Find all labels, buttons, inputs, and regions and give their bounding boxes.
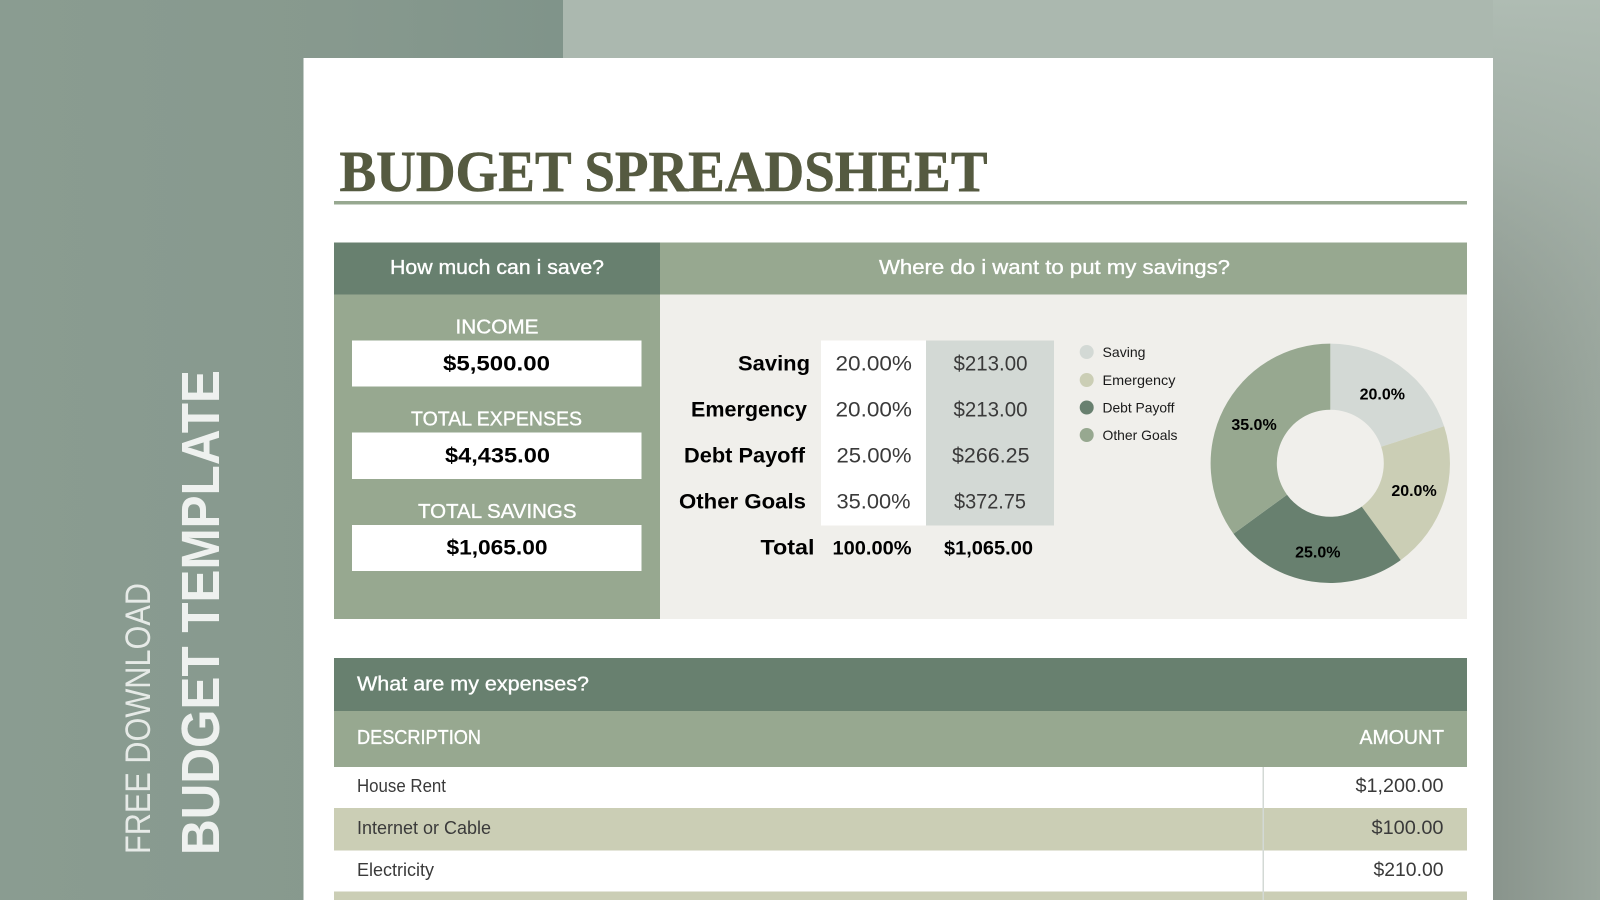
slice: saving 20% xyxy=(1330,344,1444,447)
row: house rent: House Rent xyxy=(357,776,446,796)
slice: other goals 35% xyxy=(1211,344,1330,534)
row: saving: 20.00% xyxy=(836,352,912,376)
row: internet or cable: $100.00 xyxy=(1372,818,1444,839)
row: emergency: 20.00% xyxy=(836,398,912,422)
donut labels: 20.0% xyxy=(1391,483,1437,500)
row: saving xyxy=(738,352,1028,376)
side title line: budget template: BUDGET TEMPLATE xyxy=(171,370,231,855)
slice: debt payoff 25% xyxy=(1234,495,1401,583)
row: total xyxy=(760,536,1033,560)
heading: where do i want to put my savings xyxy=(660,242,1467,294)
row: other goals xyxy=(679,490,1026,514)
donut labels: 20.0% xyxy=(1360,386,1405,404)
legend item: saving: Saving xyxy=(1102,344,1146,360)
donut labels: 35.0% xyxy=(1231,417,1277,434)
legend item: emergency: Emergency xyxy=(1102,372,1176,388)
legend item: other goals: Other Goals xyxy=(1102,427,1178,443)
panel body: savings summary xyxy=(334,294,660,619)
row: total: $1,065.00 xyxy=(944,538,1033,560)
heading: what are my expenses: What are my expenses? xyxy=(357,674,589,696)
row: internet or cable: Internet or Cable xyxy=(357,818,491,838)
row: debt payoff: $266.25 xyxy=(952,444,1030,468)
white document card xyxy=(304,58,1493,900)
value box: total savings xyxy=(352,525,642,571)
donut chart xyxy=(1211,344,1450,583)
label: total expenses: TOTAL EXPENSES xyxy=(411,408,582,430)
column headers: DESCRIPTION xyxy=(357,727,481,749)
row: debt payoff: 25.00% xyxy=(836,444,912,468)
row: debt payoff xyxy=(684,444,1030,468)
row: other goals: $372.75 xyxy=(954,490,1026,514)
row: electricity xyxy=(334,851,1467,891)
row: debt payoff: Debt Payoff xyxy=(684,444,806,468)
panel body: allocation xyxy=(660,294,1467,619)
row: total: 100.00% xyxy=(832,538,912,560)
panel: what are my expenses xyxy=(334,658,1467,900)
column headers xyxy=(334,711,1467,767)
row: house rent: $1,200.00 xyxy=(1356,776,1444,797)
panel: where do i want to put my savings xyxy=(660,242,1467,619)
row: other goals: Other Goals xyxy=(679,490,806,514)
title underline xyxy=(334,201,1467,204)
row: house rent xyxy=(334,767,1467,807)
side title line: free download: FREE DOWNLOAD xyxy=(119,583,158,854)
row: internet or cable xyxy=(334,808,1467,850)
slice: emergency 20% xyxy=(1362,426,1450,560)
heading: how much can i save xyxy=(334,242,660,294)
row: saving: Saving xyxy=(738,352,810,376)
legend item: debt payoff: Debt Payoff xyxy=(1102,400,1175,416)
row: emergency: $213.00 xyxy=(954,398,1028,422)
legend xyxy=(1080,344,1178,443)
heading: what are my expenses xyxy=(334,658,1467,711)
row: emergency xyxy=(691,398,1028,422)
donut labels xyxy=(1231,386,1437,562)
donut labels: 25.0% xyxy=(1295,544,1340,562)
row: saving: $213.00 xyxy=(954,352,1028,376)
allocation table xyxy=(679,340,1054,560)
background: right side gradient xyxy=(1493,0,1600,900)
value box: total savings: $1,065.00 xyxy=(446,536,548,560)
heading: how much can i save: How much can i save? xyxy=(390,257,604,279)
row: total: Total xyxy=(760,536,814,560)
title: budget spreadsheet: BUDGET SPREADSHEET xyxy=(340,139,988,204)
panel: how much can i save xyxy=(334,242,660,619)
label: total savings: TOTAL SAVINGS xyxy=(418,501,576,523)
row: emergency: Emergency xyxy=(691,398,807,422)
value box: total expenses xyxy=(352,432,642,479)
row: other goals: 35.00% xyxy=(836,490,910,514)
value box: total expenses: $4,435.00 xyxy=(445,444,550,468)
value box: income: $5,500.00 xyxy=(443,352,550,376)
row: electricity: Electricity xyxy=(357,860,434,880)
side title: free download budget template xyxy=(119,370,231,855)
value box: income xyxy=(352,340,642,386)
column headers: AMOUNT xyxy=(1360,727,1444,749)
column divider xyxy=(1262,767,1264,900)
background: light top right band xyxy=(563,0,1600,900)
label: income: INCOME xyxy=(456,316,538,338)
background: dark left band xyxy=(0,0,563,900)
row: next partial row xyxy=(334,892,1467,900)
heading: where do i want to put my savings: Where do i want to put my savings? xyxy=(879,257,1230,279)
row: electricity: $210.00 xyxy=(1374,860,1444,881)
